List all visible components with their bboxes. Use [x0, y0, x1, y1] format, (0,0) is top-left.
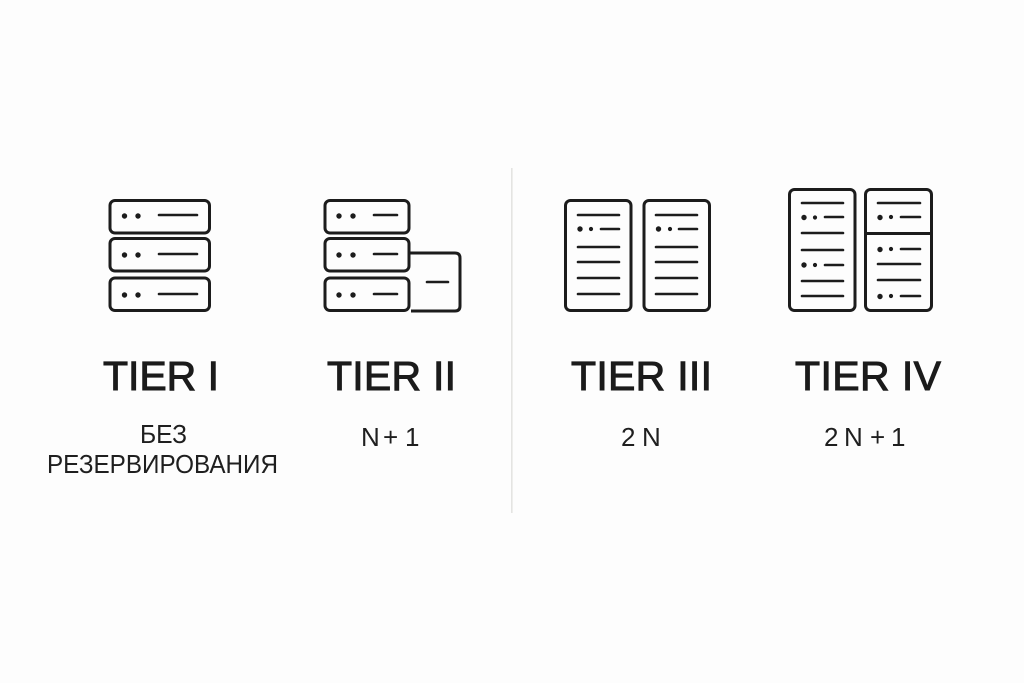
- heading: Tier II: TIER II: [327, 353, 456, 399]
- panel: Tier II: [325, 200, 460, 452]
- panel: Tier IV: [790, 190, 942, 452]
- label: no redundancy: БЕЗ: [140, 419, 187, 449]
- label: N+1: N+1: [361, 422, 419, 452]
- label: 2N+1: 2N+1: [824, 422, 905, 452]
- label: 2N: 2N: [621, 422, 661, 452]
- icon: servers with extra module: [325, 200, 460, 311]
- panel: Tier I: [47, 200, 278, 479]
- divider: [511, 168, 513, 513]
- icon: two server racks: [566, 200, 710, 310]
- heading: Tier IV: TIER IV: [795, 353, 942, 399]
- icon: three stacked servers: [110, 200, 210, 310]
- icon: two partitioned server racks: [790, 190, 932, 310]
- heading: Tier III: TIER III: [571, 353, 712, 399]
- panel: Tier III: [566, 200, 712, 452]
- heading: Tier I: TIER I: [103, 353, 219, 399]
- label: no redundancy: РЕЗЕРВИРОВАНИЯ: [47, 449, 278, 479]
